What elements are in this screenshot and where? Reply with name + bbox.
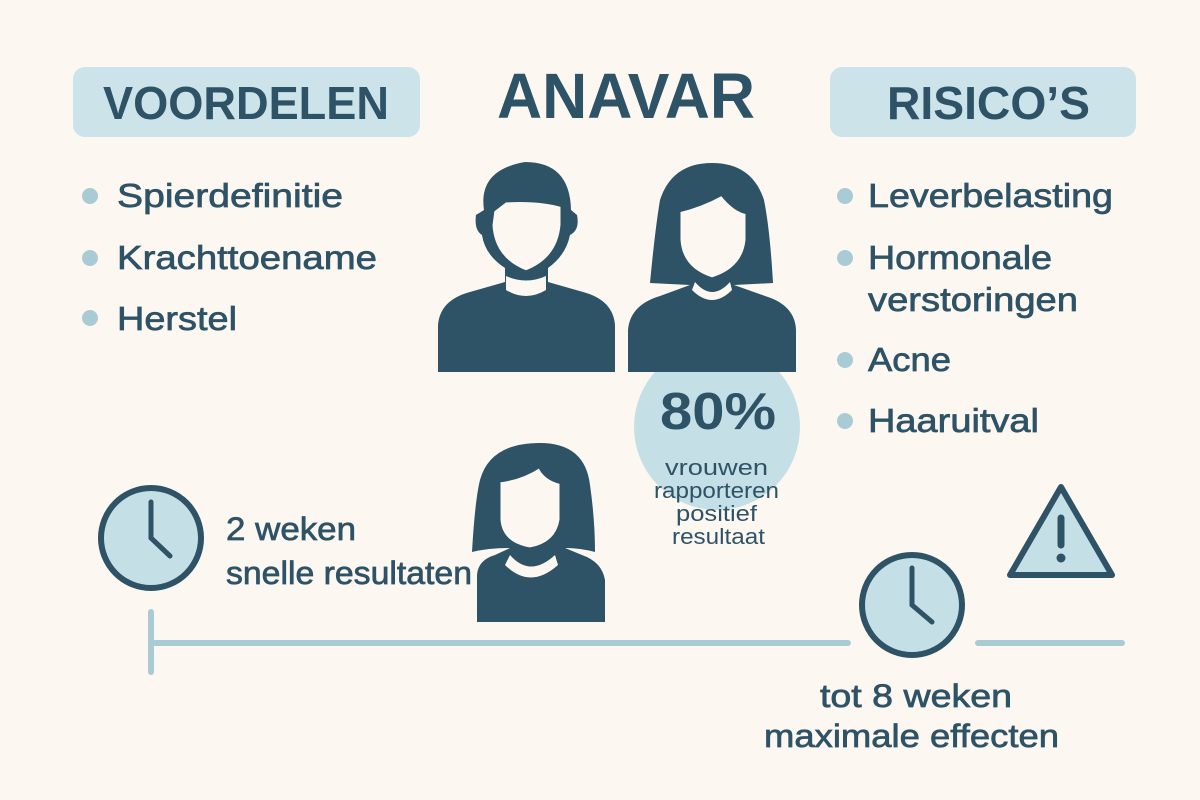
text: 2 weken: snelle resultaten	[226, 555, 472, 591]
list: risico's	[837, 177, 1113, 439]
heading: risico's: RISICO’S	[887, 77, 1090, 129]
list: risico's: Acne	[868, 341, 951, 378]
stat circle: 80%: vrouwen	[665, 455, 768, 480]
text: tot 8 weken: tot 8 weken	[820, 678, 1012, 714]
icon: man	[438, 162, 615, 372]
stat circle: 80%: 80%	[660, 383, 776, 441]
list: risico's: Haaruitval	[868, 402, 1039, 439]
text: 2 weken: 2 weken	[226, 511, 356, 547]
stat circle: 80%: positief	[676, 501, 758, 526]
icon: clock right	[862, 555, 962, 655]
list: risico's: verstoringen	[868, 281, 1078, 318]
stat circle: 80%: resultaat	[672, 524, 765, 549]
list: voordelen	[82, 177, 377, 337]
heading: voordelen	[73, 67, 420, 137]
heading: voordelen: VOORDELEN	[103, 77, 389, 129]
timeline	[151, 612, 1122, 672]
icon: woman	[628, 163, 796, 372]
text: tot 8 weken: maximale effecten	[764, 718, 1059, 754]
icon: clock left	[101, 488, 201, 588]
stat circle: 80%	[634, 344, 800, 549]
list: voordelen: Spierdefinitie	[117, 177, 343, 214]
heading: risico's	[830, 67, 1136, 137]
text: 2 weken	[226, 511, 472, 591]
list: voordelen: Herstel	[117, 300, 237, 337]
title: ANAVAR	[497, 60, 755, 132]
list: risico's: Leverbelasting	[868, 177, 1113, 214]
list: risico's: Hormonale	[868, 239, 1052, 276]
stat circle: 80%: rapporteren	[654, 478, 779, 503]
icon: warning	[1010, 487, 1112, 575]
text: tot 8 weken	[764, 678, 1059, 754]
icon: woman small	[472, 443, 605, 622]
list: voordelen: Krachttoename	[117, 239, 377, 276]
